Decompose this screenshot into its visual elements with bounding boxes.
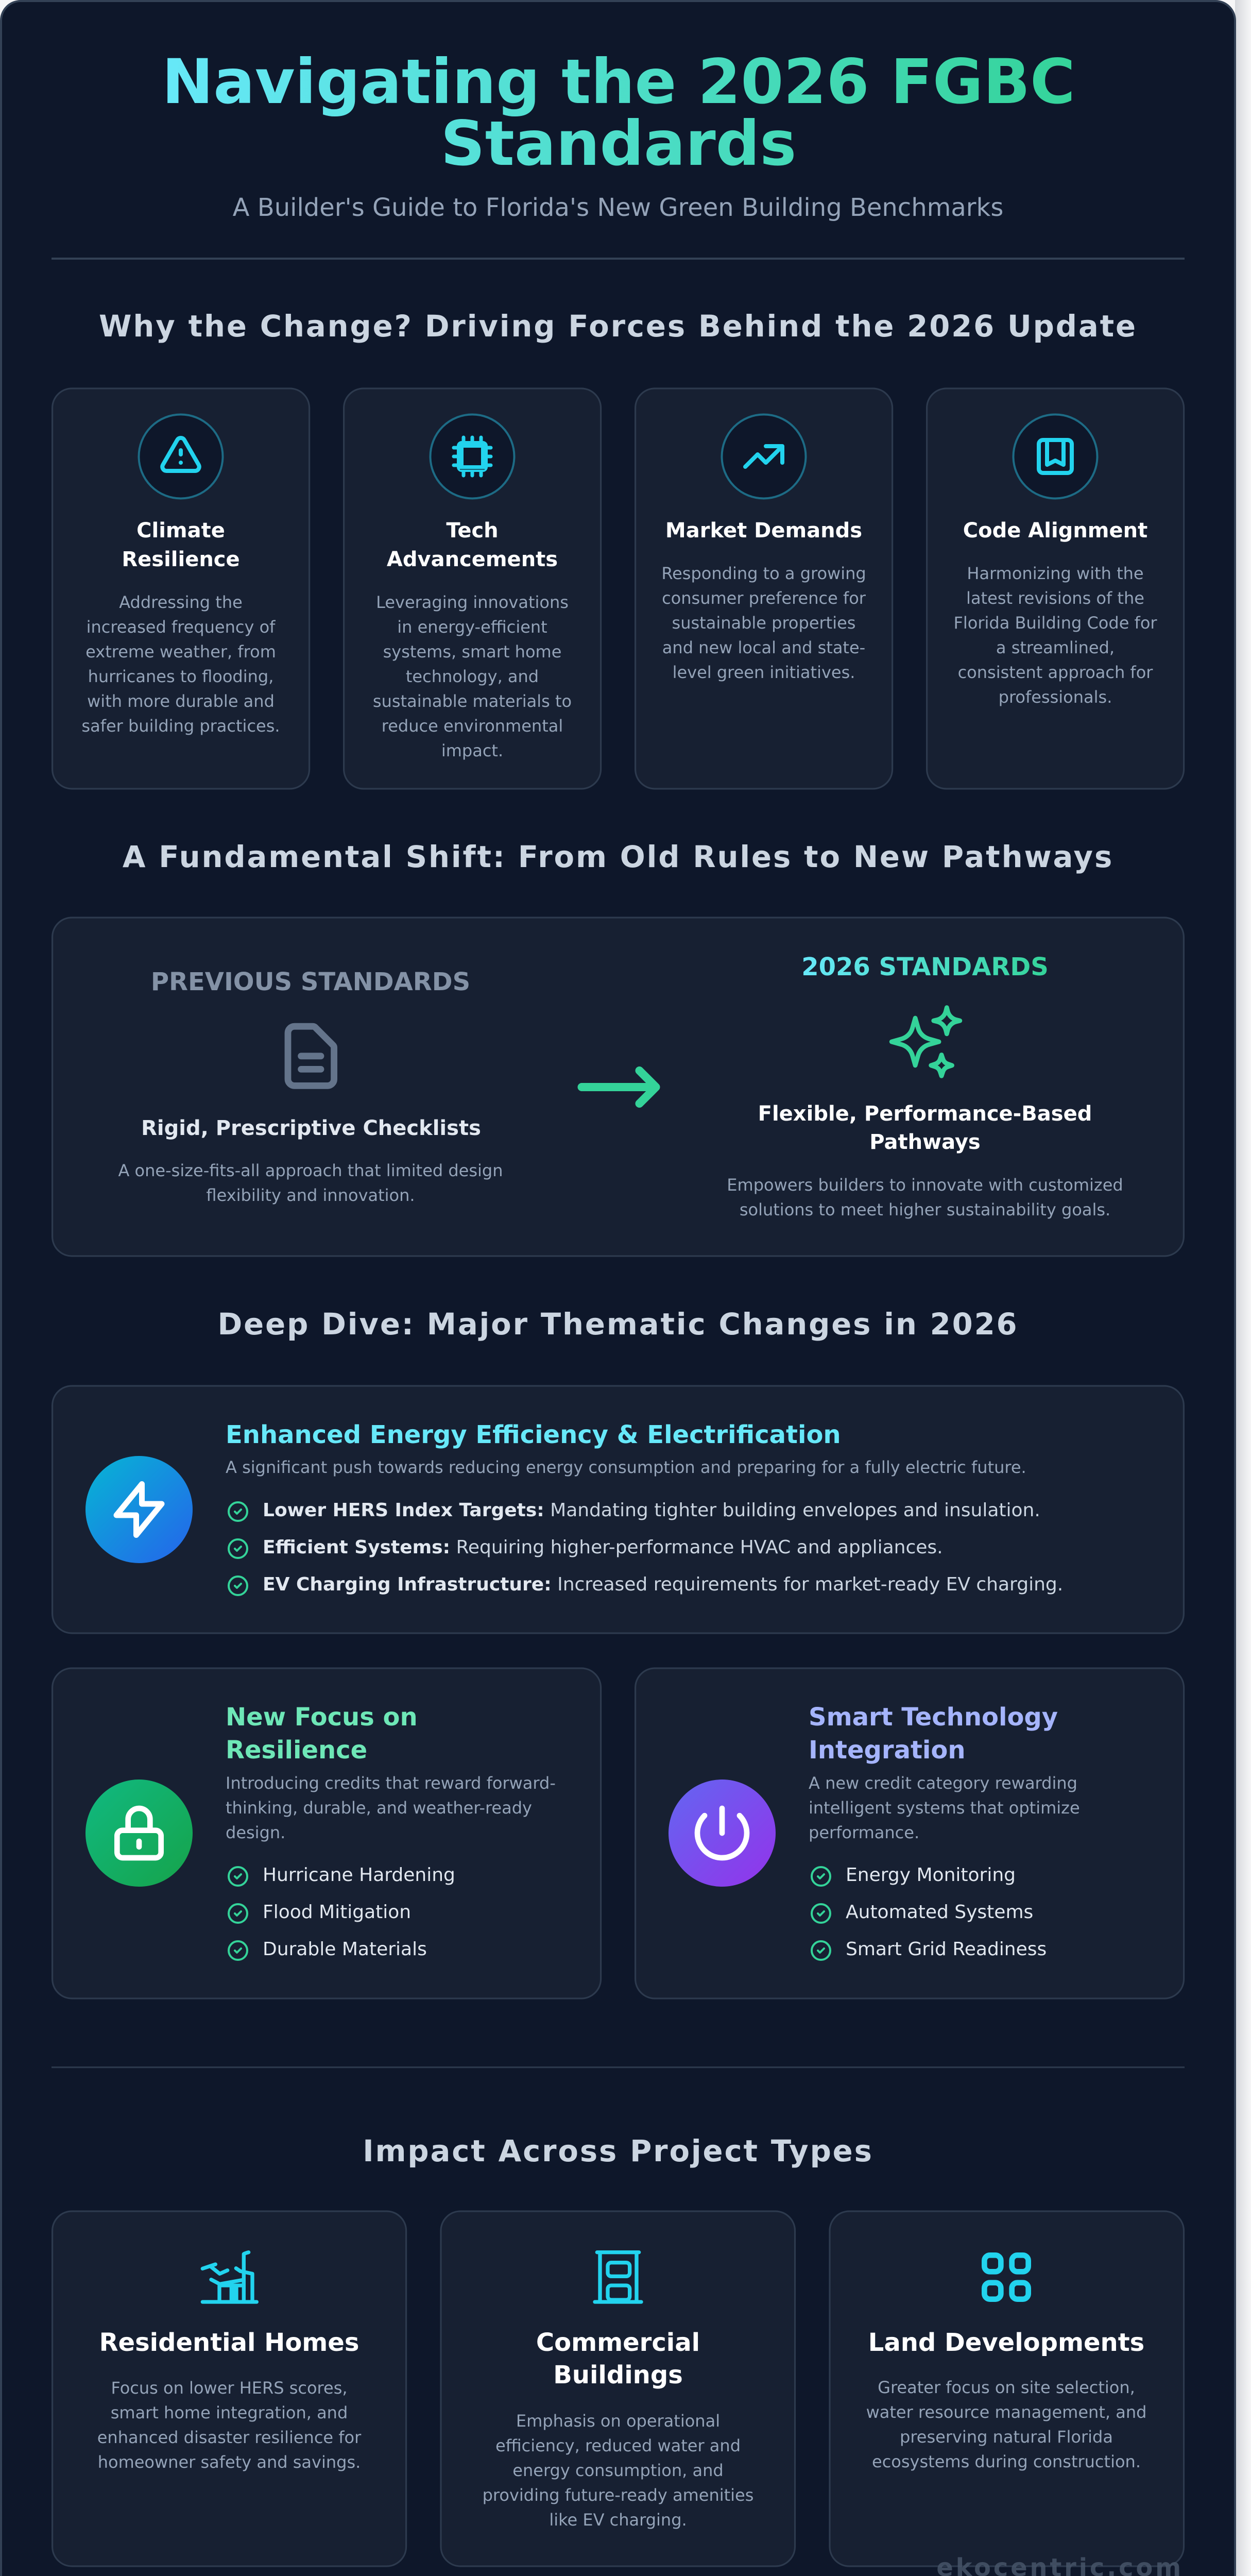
panel: code alignment [927,388,1184,789]
title: Navigating the 2026 FGBC [162,46,1075,118]
theme title: Smart Technology [809,1703,1058,1732]
check list: Hurricane Hardening [263,1865,455,1886]
card description: providing future-ready amenities [483,2485,753,2505]
check list: Efficient Systems: Requiring higher-performance HVAC and appliances. [263,1537,943,1558]
card description: Leveraging innovations [376,592,569,612]
panel: smart technology [636,1668,1184,1998]
card description: safer building practices. [81,716,280,736]
theme description: A significant push towards reducing energy consumption and preparing for a fully electric future. [226,1458,1026,1477]
theme description: Introducing credits that reward forward- [226,1773,556,1793]
panel: energy efficiency [53,1386,1184,1633]
icon: lightning bolt [85,1456,193,1563]
2026 description: Empowers builders to innovate with customized [727,1175,1123,1195]
card description: latest revisions of the [966,588,1144,608]
card description: technology, and [406,667,539,686]
card description: extreme weather, from [85,642,276,662]
card description: smart home integration, and [111,2403,348,2422]
theme description: performance. [809,1823,919,1842]
card description: energy consumption, and [512,2461,724,2480]
check list: Energy Monitoring [846,1865,1016,1886]
previous description: flexibility and innovation. [206,1185,415,1205]
card title: Land Developments [868,2328,1144,2357]
icon: document [288,1026,334,1086]
card title: Tech [446,519,499,543]
icon: grid [984,2255,1029,2299]
card description: Harmonizing with the [967,564,1144,583]
card description: water resource management, and [866,2402,1146,2422]
heading: why the change: Why the Change? Driving Forces Behind the 2026 Update [99,309,1137,344]
panel: land developments [830,2211,1184,2566]
panel: climate resilience [53,388,310,789]
icon: power [669,1780,776,1887]
card description: like EV charging. [549,2510,687,2530]
card description: increased frequency of [87,617,276,637]
theme description: design. [226,1823,285,1842]
card description: Addressing the [119,592,243,612]
panel: resilience [53,1668,601,1998]
card description: consumer preference for [662,588,866,608]
theme title: New Focus on [226,1703,418,1732]
check list: Flood Mitigation [263,1902,411,1923]
card description: Florida Building Code for [953,613,1157,633]
card description: hurricanes to flooding, [88,667,273,686]
icon: commercial building [595,2252,641,2302]
card description: ecosystems during construction. [872,2452,1141,2471]
card description: level green initiatives. [673,663,855,682]
theme description: thinking, durable, and weather-ready [226,1798,532,1818]
icon: chip [431,414,514,499]
card description: consistent approach for [958,663,1153,682]
2026 standards column [727,953,1123,1219]
theme title: Integration [809,1736,965,1765]
theme title: Resilience [226,1736,367,1765]
check list [812,1865,1047,1960]
heading: impact: Impact Across Project Types [363,2134,873,2168]
icon: trending up [722,414,806,499]
icon: bookmark book [1014,414,1097,499]
icon: lock [85,1780,193,1887]
card title: Commercial [536,2328,700,2357]
theme title: Enhanced Energy Efficiency & Electrification [226,1420,841,1449]
panel: tech advancements [344,388,601,789]
card description: systems, smart home [383,642,561,662]
check list: Durable Materials [263,1939,427,1960]
previous standards column [118,968,503,1205]
panel: market demands [636,388,893,789]
card description: and new local and state- [662,638,865,657]
panel: commercial buildings [441,2211,795,2566]
title: Standards [441,108,796,180]
panel: old vs new comparison [53,918,1184,1256]
header [162,46,1075,222]
check list: Smart Grid Readiness [846,1939,1047,1960]
icon: residential [202,2252,256,2302]
heading: deep dive: Deep Dive: Major Thematic Changes in 2026 [217,1307,1019,1342]
previous description: A one-size-fits-all approach that limited design [118,1161,503,1180]
previous label: PREVIOUS STANDARDS [151,968,470,996]
card description: preserving natural Florida [900,2427,1113,2447]
panel: residential homes [53,2211,406,2566]
card description: sustainable properties [672,613,855,633]
2026 title: Flexible, Performance-Based [758,1102,1092,1126]
card description: with more durable and [87,691,275,711]
check list: Lower HERS Index Targets: Mandating tighter building envelopes and insulation. [263,1500,1040,1521]
card title: Buildings [553,2361,683,2389]
theme description: A new credit category rewarding [809,1773,1077,1793]
card description: Greater focus on site selection, [878,2378,1135,2397]
2026 title: Pathways [869,1130,981,1154]
icon: sparkles [892,1008,960,1076]
card description: in energy-efficient [397,617,547,637]
card description: efficiency, reduced water and [495,2436,741,2455]
card title: Market Demands [665,519,862,543]
check list: EV Charging Infrastructure: Increased requirements for market-ready EV charging. [263,1574,1063,1595]
previous title: Rigid, Prescriptive Checklists [141,1116,481,1140]
heading: fundamental shift: A Fundamental Shift: From Old Rules to New Pathways [123,840,1113,874]
card description: Emphasis on operational [516,2411,720,2431]
card title: Advancements [387,548,558,571]
card description: enhanced disaster resilience for [97,2428,362,2447]
check list: Automated Systems [846,1902,1033,1923]
card description: impact. [441,741,503,760]
card description: homeowner safety and savings. [98,2452,361,2472]
subtitle: A Builder's Guide to Florida's New Green Building Benchmarks [233,193,1003,222]
check list [229,1865,455,1960]
card title: Residential Homes [99,2328,359,2357]
theme description: intelligent systems that optimize [809,1798,1080,1818]
icon: warning triangle [139,414,222,499]
card description: professionals. [999,687,1112,707]
check list [229,1500,1063,1595]
card description: Responding to a growing [661,564,866,583]
card description: reduce environmental [382,716,563,736]
card description: Focus on lower HERS scores, [111,2378,348,2398]
card title: Resilience [122,548,240,571]
arrow [582,1071,656,1104]
card description: sustainable materials to [373,691,572,711]
2026 description: solutions to meet higher sustainability goals. [740,1200,1110,1219]
card title: Code Alignment [963,519,1147,543]
2026 label: 2026 STANDARDS [801,953,1049,981]
card description: a streamlined, [996,638,1115,657]
card title: Climate [136,519,225,543]
